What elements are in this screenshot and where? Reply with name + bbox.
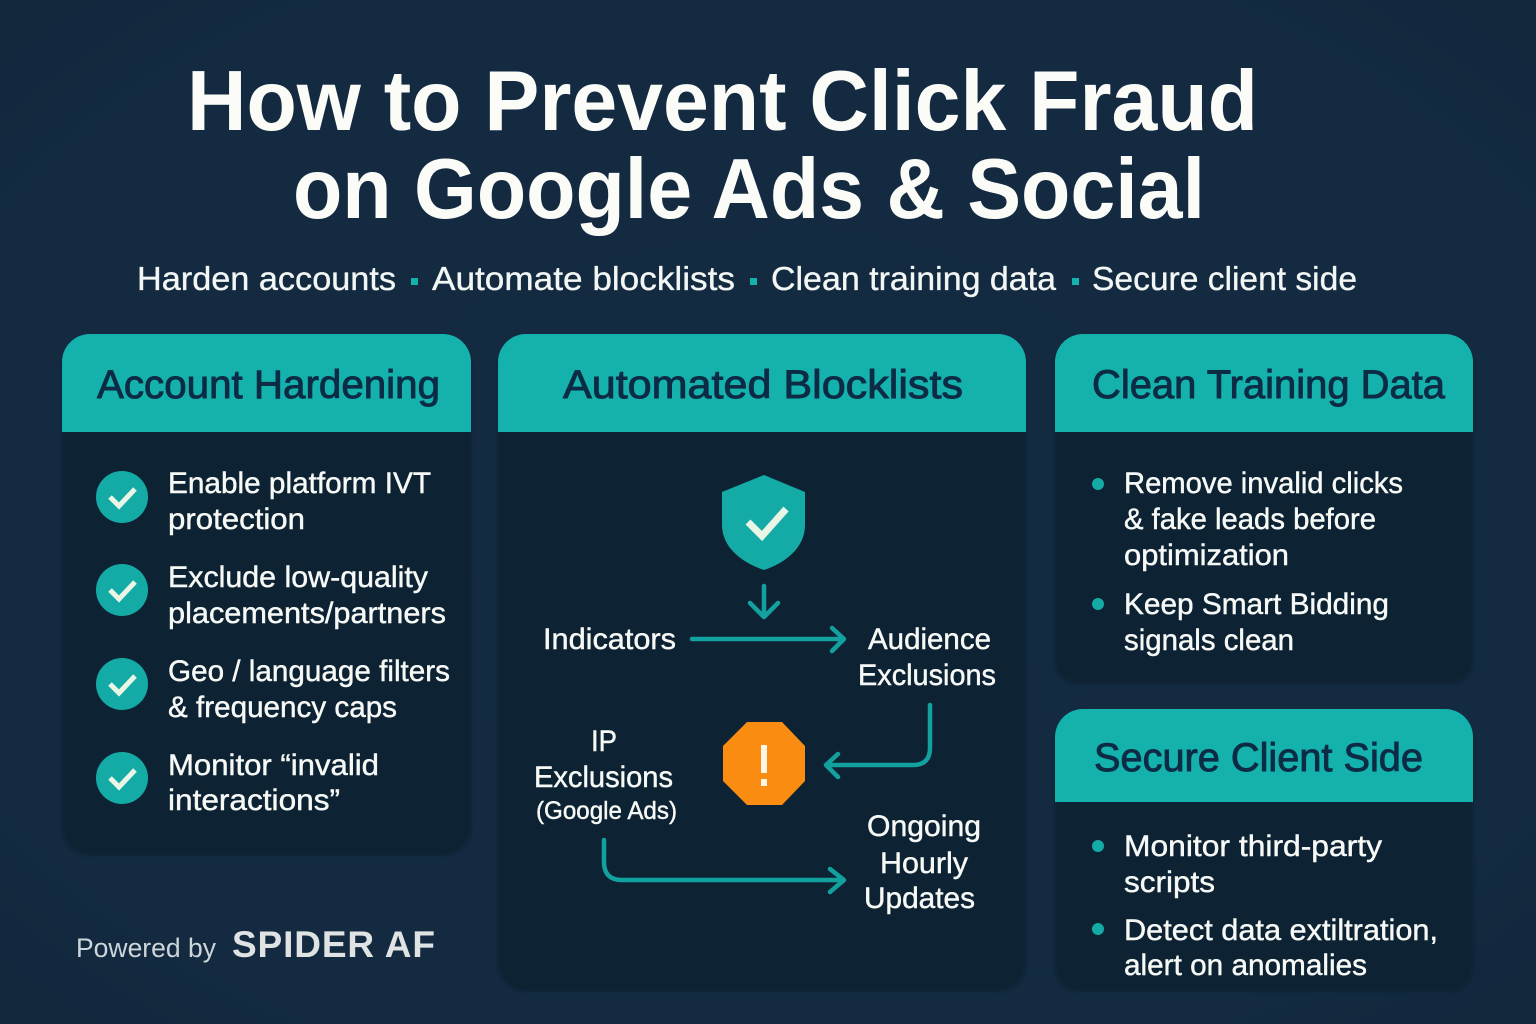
bullet: keep smart bidding signals clean [1092, 588, 1389, 657]
item: exclude low-quality placements: placements/partners [168, 597, 446, 630]
label: audience exclusions: Exclusions [858, 659, 996, 692]
item: enable platform IVT protection: protection [168, 503, 305, 536]
bullet: remove invalid clicks: & fake leads before [1124, 503, 1376, 536]
arrow: IP exclusions to updates [604, 840, 844, 892]
label: indicators: Indicators [543, 623, 676, 656]
bullet: remove invalid clicks [1092, 467, 1403, 572]
panel: automated blocklists [498, 334, 1026, 991]
label: IP exclusions: Exclusions [534, 761, 673, 794]
subtitle: Clean training data [771, 260, 1057, 297]
header: automated blocklists [498, 334, 1026, 432]
label: IP exclusions: IP [591, 725, 617, 758]
bullet: remove invalid clicks: Remove invalid clicks [1124, 467, 1403, 500]
title: How to Prevent Click Fraud [187, 54, 1258, 149]
icon: shield with check [722, 475, 805, 570]
header: secure client side [1055, 709, 1473, 802]
header: secure client side: Secure Client Side [1094, 736, 1423, 780]
label: ongoing hourly updates: Updates [864, 882, 975, 915]
icon: warning octagon [723, 722, 805, 805]
header: automated blocklists: Automated Blocklists [563, 363, 963, 407]
item: monitor invalid interactions: Monitor “invalid [168, 749, 379, 782]
title: on Google Ads & Social [293, 142, 1205, 237]
arrow: indicators to audience exclusions [692, 628, 844, 651]
header: clean training data: Clean Training Data [1092, 363, 1446, 407]
item: exclude low-quality placements: Exclude low-quality [168, 561, 428, 594]
powered by branding [76, 924, 435, 965]
item: geo and language filters [96, 655, 450, 724]
header: account hardening: Account Hardening [97, 363, 440, 407]
title [187, 54, 1258, 237]
item: geo and language filters: Geo / language filters [168, 655, 450, 688]
subtitle: Automate blocklists [432, 260, 735, 297]
label: IP exclusions [534, 725, 677, 825]
powered by branding: Powered by [76, 933, 216, 963]
label: IP exclusions: (Google Ads) [536, 797, 677, 825]
bullet: detect data exfiltration: Detect data extiltration, [1124, 914, 1438, 947]
panel: clean training data [1055, 334, 1473, 684]
bullet: keep smart bidding signals clean: signals clean [1124, 624, 1294, 657]
label: ongoing hourly updates: Hourly [880, 847, 968, 880]
panel: secure client side [1055, 709, 1473, 991]
bullet: monitor third-party scripts: scripts [1124, 866, 1215, 899]
header: account hardening [62, 334, 471, 432]
label: audience exclusions: Audience [868, 623, 991, 656]
item: enable platform IVT protection: Enable platform IVT [168, 467, 431, 500]
arrow: audience exclusions to warning [826, 705, 930, 777]
item: geo and language filters: & frequency caps [168, 691, 397, 724]
arrow: shield to flow [750, 586, 778, 617]
bullet: remove invalid clicks: optimization [1124, 539, 1289, 572]
label: audience exclusions [858, 623, 996, 692]
label: ongoing hourly updates [864, 810, 981, 915]
bullet: monitor third-party scripts: Monitor third-party [1124, 830, 1382, 863]
subtitle: Harden accounts [137, 260, 396, 297]
item: monitor invalid interactions [96, 749, 379, 817]
label: ongoing hourly updates: Ongoing [867, 810, 981, 843]
header: clean training data [1055, 334, 1473, 432]
item: enable platform IVT protection [96, 467, 431, 536]
panel: account hardening [62, 334, 471, 855]
subtitle [137, 260, 1357, 297]
bullet: detect data exfiltration: alert on anomalies [1124, 949, 1367, 982]
powered by branding: SPIDER AF [232, 924, 435, 965]
subtitle: Secure client side [1092, 260, 1357, 297]
bullet: monitor third-party scripts [1092, 830, 1382, 899]
bullet: detect data exfiltration [1092, 914, 1438, 982]
item: exclude low-quality placements [96, 561, 446, 630]
item: monitor invalid interactions: interactions” [168, 784, 340, 817]
bullet: keep smart bidding signals clean: Keep Smart Bidding [1124, 588, 1389, 621]
